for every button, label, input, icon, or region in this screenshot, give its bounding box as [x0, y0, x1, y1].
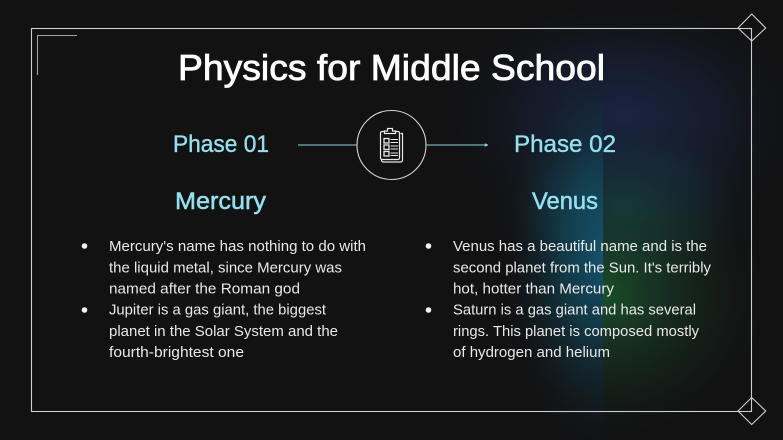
text block: Venus bullets [426, 239, 712, 361]
text block: Venus bullets: Saturn is a gas giant and has several [453, 303, 696, 319]
text block: Mercury bullets: Jupiter is a gas giant, the biggest [109, 303, 326, 319]
text block: Mercury bullets: the liquid metal, since Mercury was [109, 260, 342, 276]
text block: Mercury bullets: named after the Roman god [109, 282, 300, 298]
heading: Venus: Venus [532, 188, 598, 215]
diamond: bottom right [738, 398, 766, 424]
text block: Mercury bullets [82, 239, 366, 361]
diamond: top right [738, 14, 766, 41]
icon: clipboard checklist [380, 128, 402, 162]
heading: Phase 01: Phase 01 [173, 131, 269, 158]
text block: Venus bullets: rings. This planet is composed mostly [453, 324, 700, 340]
arrow right [426, 144, 488, 146]
text block: Mercury bullets: fourth-brightest one [109, 345, 244, 361]
text block: Venus bullets: of hydrogen and helium [453, 345, 610, 361]
background glow [435, 0, 783, 440]
heading: Mercury: Mercury [175, 188, 266, 215]
text block: Venus bullets: hot, hotter than Mercury [453, 282, 615, 298]
text block: Venus bullets: Venus has a beautiful name and is the [453, 239, 707, 255]
connector line left [298, 144, 357, 146]
text block: Venus bullets: second planet from the Sun. It's terribly [453, 260, 712, 276]
icon circle with clipboard [357, 110, 426, 180]
heading: Phase 02: Phase 02 [514, 131, 616, 158]
text block: Mercury bullets: planet in the Solar System and the [109, 324, 338, 340]
inner corner accent [38, 36, 77, 75]
text block: Mercury bullets: Mercury's name has nothing to do with [109, 239, 366, 255]
title: Physics for Middle School [178, 47, 605, 88]
